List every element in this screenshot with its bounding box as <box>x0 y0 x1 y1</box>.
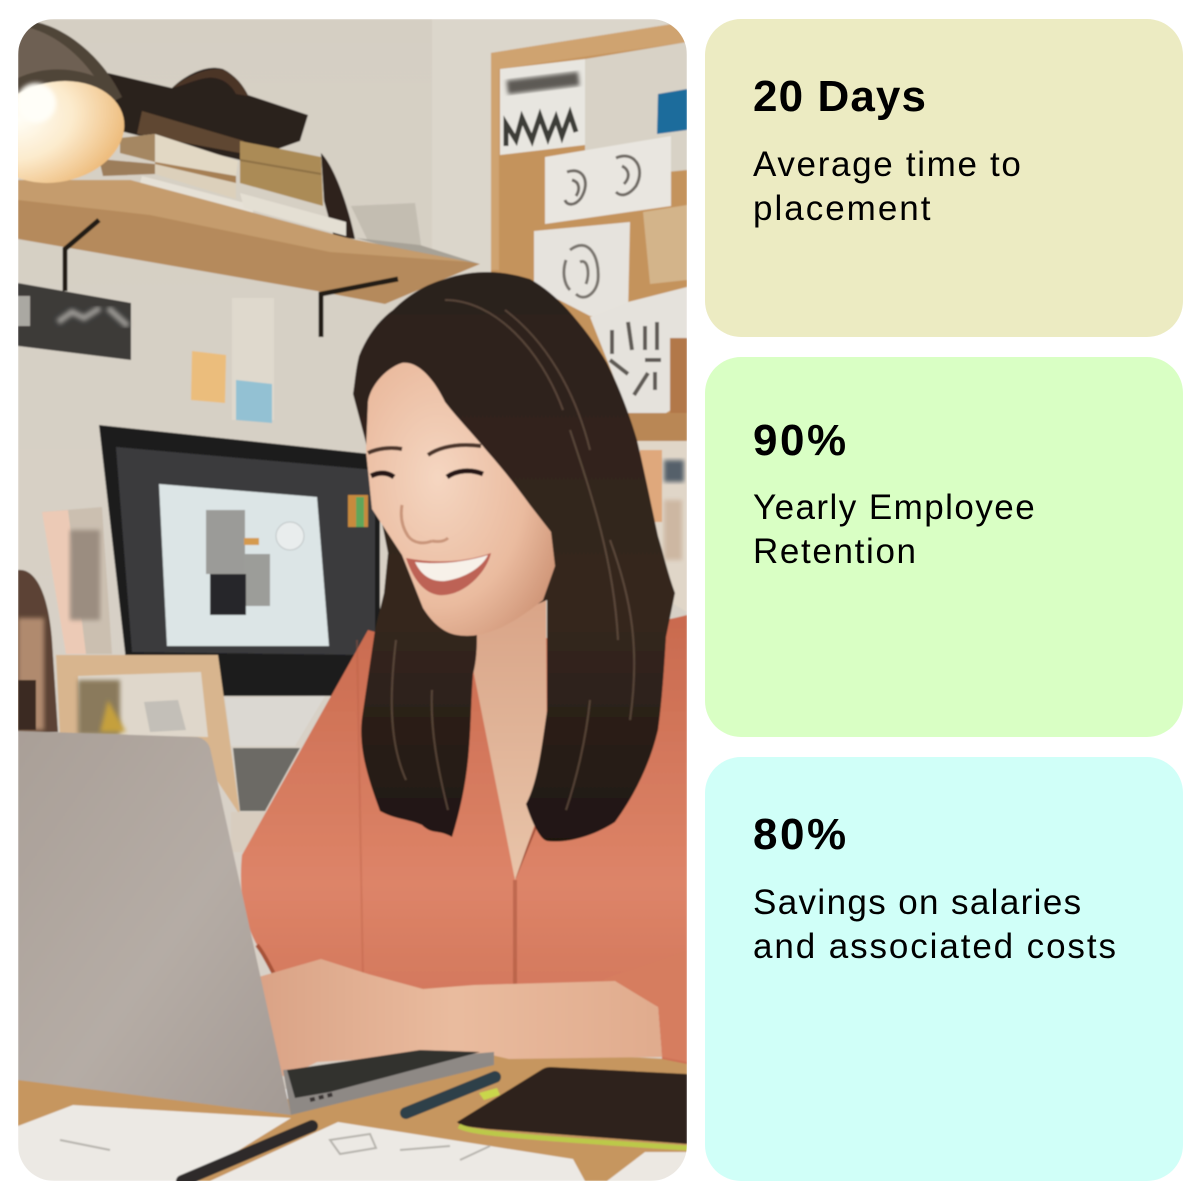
pinned head sketches <box>545 136 671 224</box>
description: average time to placement: placement <box>753 189 932 228</box>
description: savings on salaries: and associated costs <box>753 927 1118 966</box>
background wall <box>18 19 687 1089</box>
eyebrows <box>368 445 481 455</box>
stat: 90%: 90% <box>753 416 849 465</box>
stat: 80%: 80% <box>753 810 849 859</box>
smile <box>406 553 491 595</box>
panel: 90% stat card <box>705 357 1183 737</box>
description: savings on salaries: Savings on salaries <box>753 883 1083 922</box>
pinned typography sheet <box>500 59 585 155</box>
hair strands <box>392 300 634 810</box>
wooden wall shelf <box>18 180 480 337</box>
open sketch notebook <box>18 1105 687 1181</box>
panel: 20 Days stat card <box>705 19 1183 337</box>
left desk objects and frames <box>18 507 273 852</box>
description: yearly employee retention: Yearly Employee <box>753 488 1036 527</box>
panel: 80% stat card <box>705 757 1183 1181</box>
neck and chest <box>472 600 548 880</box>
nose <box>401 505 448 543</box>
eyes <box>371 471 483 477</box>
orange blouse <box>241 615 687 1064</box>
face <box>366 363 555 636</box>
description: average time to placement <box>753 145 1023 228</box>
pinned ear sketch <box>534 222 630 316</box>
bag and books on shelf <box>99 68 480 264</box>
hair: back and side mass <box>353 272 675 842</box>
desk <box>18 1050 687 1181</box>
pens and graphics tablet <box>406 1067 687 1148</box>
panel: photo of smiling designer working at a laptop <box>18 19 687 1181</box>
description: yearly employee retention: Retention <box>753 532 918 571</box>
laptop <box>18 731 494 1115</box>
description: savings on salaries <box>753 883 1118 966</box>
desktop monitor <box>99 425 380 811</box>
sticky notes <box>191 298 274 423</box>
stat: 20 Days: 20 Days <box>753 72 927 121</box>
pinned figure sketches <box>590 287 687 413</box>
desk lamp <box>18 22 126 184</box>
arm and hand <box>247 959 662 1077</box>
wall corner shading <box>598 34 599 35</box>
description: average time to placement: Average time to <box>753 145 1023 184</box>
dark photo strip on wall <box>18 283 131 360</box>
description: yearly employee retention <box>753 488 1036 571</box>
corkboard with pinned sketches <box>491 23 687 612</box>
